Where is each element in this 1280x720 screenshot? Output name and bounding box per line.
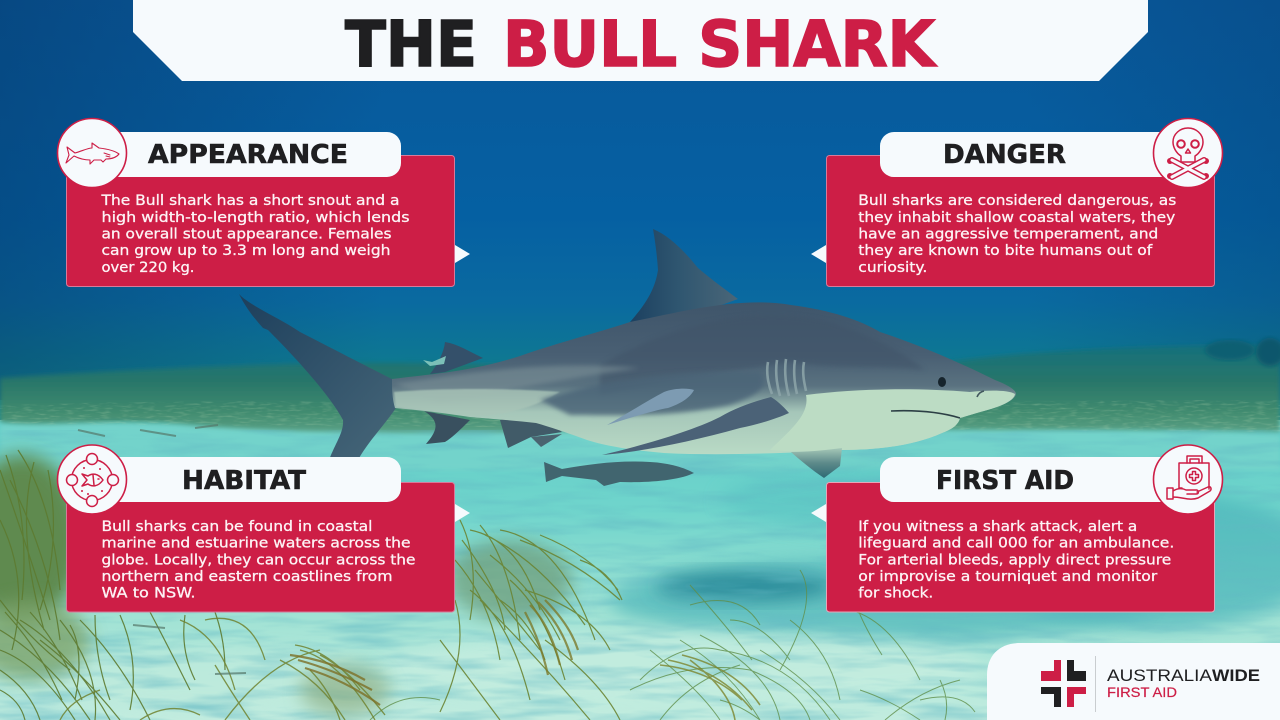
heading: APPEARANCE: [148, 140, 348, 170]
heading: DANGER: [943, 140, 1066, 170]
grey mid patch: [540, 371, 764, 415]
gill slits: [767, 359, 806, 396]
icon: habitat cycle with fish: [58, 445, 126, 514]
body text: an overall stout appearance. Females: [102, 226, 392, 242]
body text: high width-to-length ratio, which lends: [102, 209, 410, 226]
arrow: [811, 504, 826, 522]
title: BULL SHARK: [503, 8, 937, 81]
heading pill: [880, 457, 1195, 502]
heading pill: [880, 132, 1195, 177]
card: [66, 156, 454, 286]
body text: they inhabit shallow coastal waters, they: [858, 209, 1176, 226]
tail fin: [239, 294, 396, 460]
body text: WA to NSW.: [102, 585, 196, 602]
heading pill: [100, 457, 401, 502]
rear fins: [424, 411, 470, 444]
body text: for shock.: [858, 585, 933, 602]
icon: shark: [58, 118, 126, 188]
pectoral fin: [602, 397, 789, 455]
panel: danger: [811, 118, 1222, 286]
card: [66, 482, 454, 612]
body text: northern and eastern coastlines from: [102, 568, 392, 585]
shark dark back shading: [600, 315, 925, 395]
body text: The Bull shark has a short snout and a: [100, 192, 400, 209]
body text: curiosity.: [858, 259, 927, 276]
nostril: [977, 391, 984, 397]
second dorsal fin: [430, 342, 483, 374]
remora: [607, 389, 694, 425]
icon: skull and crossbones: [1154, 118, 1222, 188]
body text: have an aggressive temperament, and: [858, 226, 1158, 242]
body text: Bull sharks are considered dangerous, as: [858, 192, 1176, 209]
body text: can grow up to 3.3 m long and weigh: [102, 242, 390, 259]
mouth: [891, 411, 960, 418]
body text: [858, 518, 1174, 602]
shark: [239, 229, 1016, 486]
logo subline: FIRST AID: [1107, 684, 1177, 700]
body text: they are known to bite humans out of: [858, 242, 1153, 259]
heading: FIRST AID: [936, 466, 1074, 496]
title banner: [133, 0, 1148, 81]
first dorsal fin: [630, 229, 738, 322]
reef fish: [423, 356, 446, 366]
logo panel: WIDE: [1212, 666, 1260, 685]
body text: For arterial bleeds, apply direct pressure: [858, 551, 1171, 568]
arrow: [455, 245, 470, 263]
body text: [858, 192, 1176, 276]
title: THE: [345, 8, 477, 81]
icon: first aid kit in hand: [1154, 445, 1222, 514]
eye: [938, 377, 946, 387]
body text: marine and estuarine waters across the: [102, 535, 411, 552]
card: [826, 156, 1214, 286]
panel: first aid: [811, 445, 1222, 612]
body text: [102, 518, 416, 602]
heading: HABITAT: [182, 466, 306, 496]
heading pill: [100, 132, 401, 177]
logo wordmark: AUSTRALIA: [1107, 666, 1213, 685]
pale head underside: [770, 389, 1015, 451]
pale flank stripe: [395, 366, 640, 402]
body text: [100, 192, 410, 276]
panel: appearance: [58, 118, 470, 286]
body text: over 220 kg.: [102, 259, 194, 276]
arrow: [811, 245, 826, 263]
body text: lifeguard and call 000 for an ambulance.: [858, 535, 1174, 552]
small fish: [544, 461, 694, 486]
body text: Bull sharks can be found in coastal: [102, 518, 372, 535]
panel: habitat: [58, 445, 470, 612]
body text: If you witness a shark attack, alert a: [858, 518, 1137, 535]
arrow: [455, 504, 470, 522]
card: [826, 482, 1214, 612]
logo cross: [1041, 660, 1086, 707]
body text: globe. Locally, they can occur across the: [102, 551, 416, 568]
body text: or improvise a tourniquet and monitor: [858, 568, 1157, 585]
shark body: [392, 302, 1016, 454]
pale tail-side flank: [394, 389, 560, 416]
lower pectoral fin: [791, 448, 842, 478]
logo panel: [987, 643, 1280, 720]
